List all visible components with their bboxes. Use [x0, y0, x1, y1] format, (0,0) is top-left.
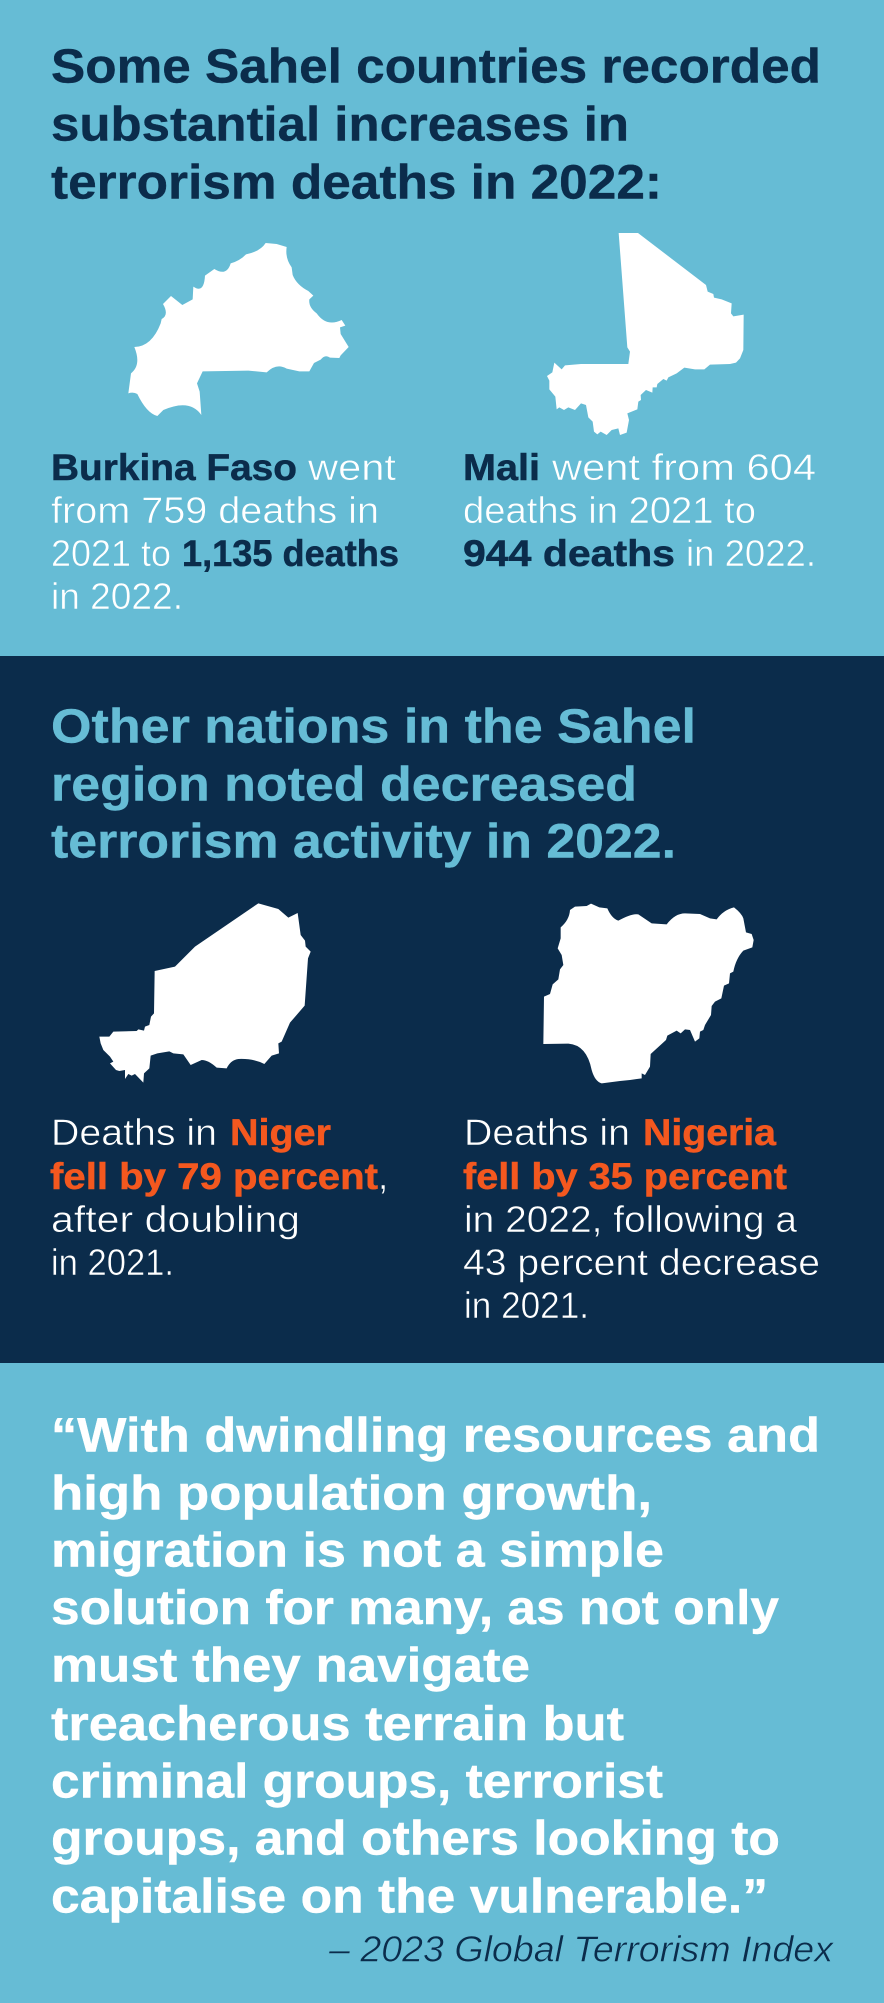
text: Niger deaths: after doubling — [51, 1199, 300, 1240]
heading: decreased terrorism activity: terrorism activity in 2022. — [51, 816, 676, 869]
text: Burkina Faso deaths: 2021 to — [51, 533, 171, 574]
panel: Sahel nations with decreases — [0, 656, 884, 1363]
heading: increases in terrorism deaths: substantial increases in — [51, 99, 629, 152]
quote text: capitalise on the vulnerable.” — [51, 1870, 768, 1923]
quote text: must they navigate — [51, 1640, 530, 1693]
quote text: criminal groups, terrorist — [51, 1755, 663, 1808]
text: Nigeria deaths — [463, 1112, 820, 1326]
quote text: “With dwindling resources and — [51, 1410, 820, 1463]
text: Burkina Faso deaths: Burkina Faso — [51, 447, 297, 488]
text: Nigeria deaths: fell by 35 percent — [463, 1156, 787, 1197]
quote text: migration is not a simple — [51, 1525, 664, 1578]
text: Nigeria deaths: in 2021. — [464, 1285, 589, 1326]
quote text: solution for many, as not only — [51, 1582, 779, 1635]
text: Mali deaths: went from 604 — [551, 447, 816, 488]
panel: Sahel countries with increases — [0, 0, 884, 656]
text: Burkina Faso deaths: went — [307, 447, 397, 488]
text: Burkina Faso deaths: in 2022. — [51, 576, 183, 617]
panel: quote — [0, 1363, 884, 2003]
attribution: – 2023 Global Terrorism Index — [328, 1929, 835, 1970]
heading: decreased terrorism activity: region noted decreased — [51, 759, 637, 812]
text: Niger deaths: Niger — [230, 1112, 331, 1153]
text: Mali deaths — [463, 447, 816, 574]
text: Nigeria deaths: in 2022, following a — [464, 1199, 797, 1240]
quote text: treacherous terrain but — [51, 1698, 624, 1751]
heading: decreased terrorism activity — [51, 701, 696, 869]
heading: increases in terrorism deaths: terrorism deaths in 2022: — [51, 156, 662, 209]
text: Burkina Faso deaths: 1,135 deaths — [182, 533, 399, 574]
icon: Burkina Faso map — [128, 243, 349, 416]
text: Mali deaths: deaths in 2021 to — [463, 490, 756, 531]
text: Mali deaths: in 2022. — [686, 533, 816, 574]
text: Nigeria deaths: Deaths in — [464, 1112, 630, 1153]
icon: Nigeria map — [543, 904, 754, 1083]
text: Niger deaths — [50, 1112, 388, 1283]
heading: decreased terrorism activity: Other nations in the Sahel — [51, 701, 696, 754]
quote text — [51, 1410, 820, 1923]
heading: increases in terrorism deaths: Some Sahel countries recorded — [51, 41, 821, 94]
text: Niger deaths: in 2021. — [51, 1242, 174, 1283]
text: Mali deaths: Mali — [463, 447, 540, 488]
icon: Niger map — [99, 903, 311, 1083]
text: Burkina Faso deaths — [51, 447, 399, 617]
quote text: high population growth, — [51, 1467, 652, 1520]
quote text: groups, and others looking to — [51, 1813, 780, 1866]
text: Niger deaths: fell by 79 percent — [50, 1156, 378, 1197]
text: Nigeria deaths: Nigeria — [643, 1112, 776, 1153]
heading: increases in terrorism deaths — [51, 41, 821, 209]
text: Nigeria deaths: 43 percent decrease — [463, 1242, 820, 1283]
text: Burkina Faso deaths: from 759 deaths in — [51, 490, 379, 531]
icon: Mali map — [547, 233, 744, 435]
text: Niger deaths: , — [378, 1156, 388, 1197]
text: Mali deaths: 944 deaths — [463, 533, 675, 574]
text: Niger deaths: Deaths in — [51, 1112, 217, 1153]
